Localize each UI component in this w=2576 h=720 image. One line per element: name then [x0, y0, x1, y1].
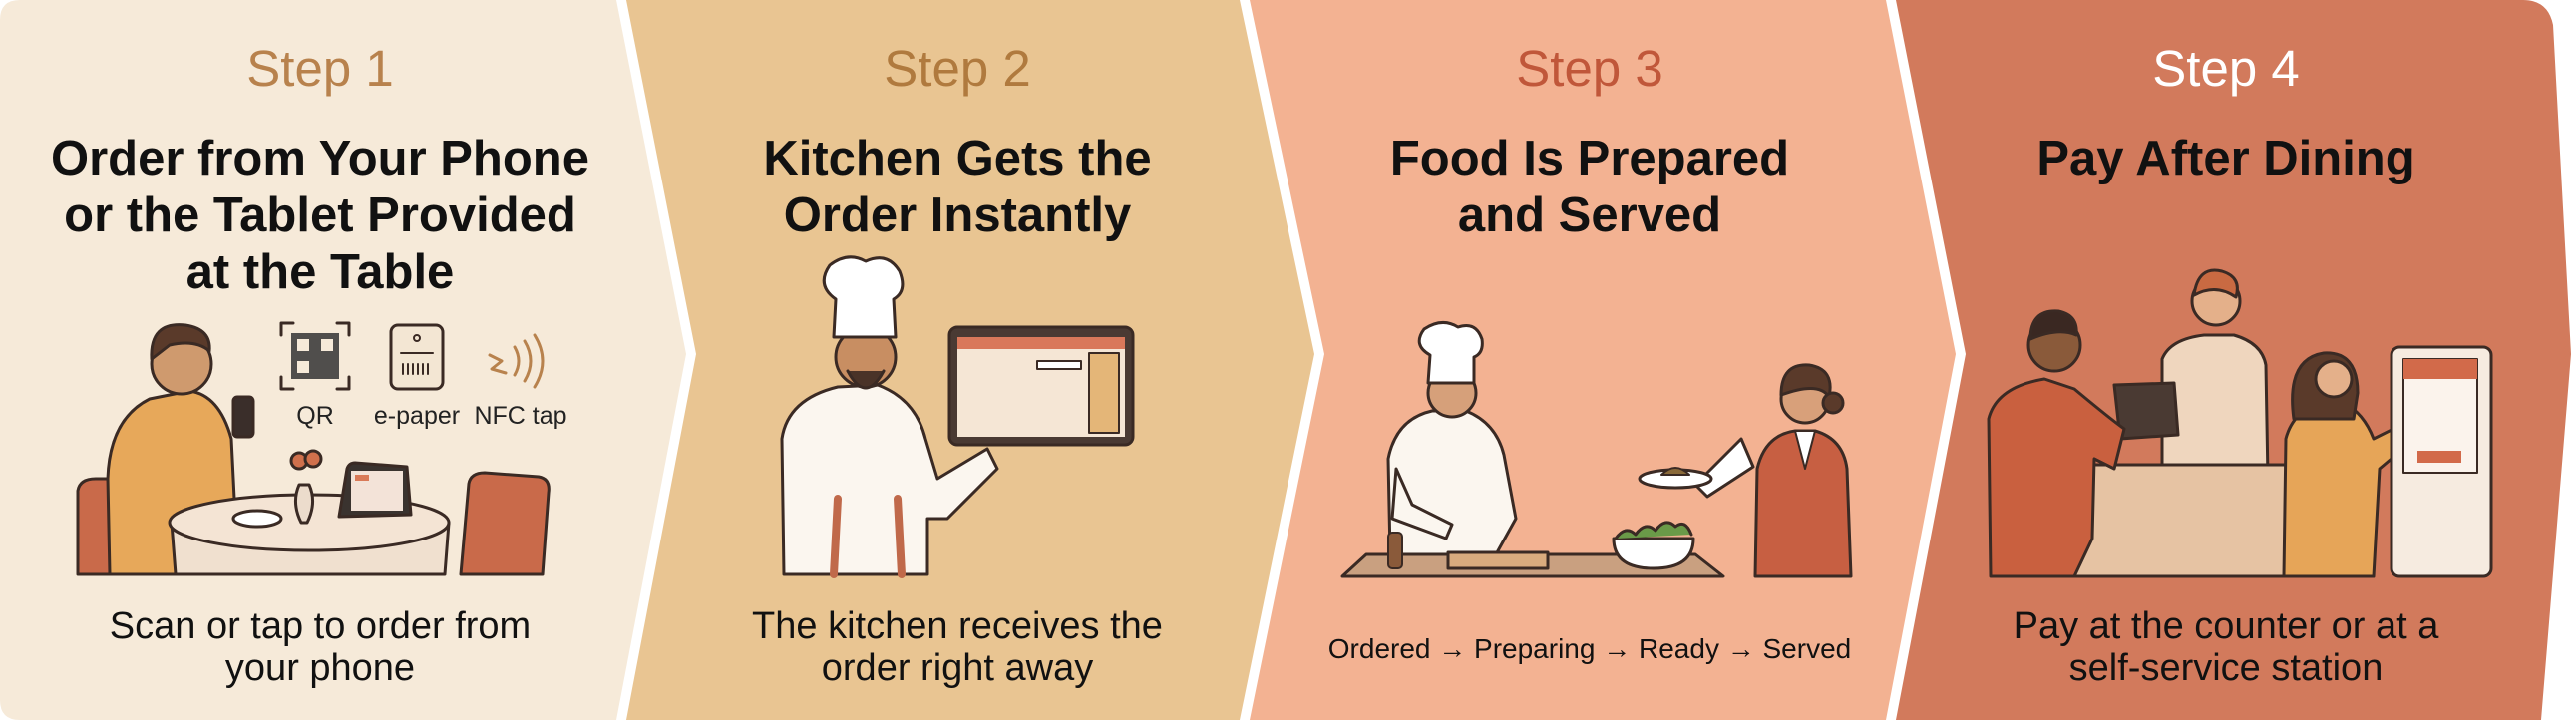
step 2 caption: The kitchen receives the — [752, 605, 1163, 647]
icon: QR — [281, 323, 349, 389]
step 1 label: Step 1 — [246, 40, 394, 97]
panel: step 1: NFC tap — [474, 402, 567, 430]
step 1 title: or the Tablet Provided — [64, 188, 576, 242]
icon: NFC — [490, 335, 543, 387]
step 1 caption: your phone — [225, 647, 415, 689]
illustration: diner at table — [78, 325, 549, 574]
step 3 caption: Ordered → Preparing → Ready → Served — [1328, 633, 1851, 664]
step 2 caption: order right away — [822, 647, 1093, 689]
panel: step 2 — [626, 0, 1314, 720]
step 1 title: Order from Your Phone — [51, 132, 589, 185]
panel: step 1: e-paper — [374, 402, 460, 430]
step 2 title: Kitchen Gets the — [763, 132, 1152, 185]
step 4 title: Pay After Dining — [2036, 132, 2415, 185]
step 1 caption: Scan or tap to order from — [110, 605, 531, 647]
illustration: counter and kiosk — [1989, 270, 2491, 576]
step 3 label: Step 3 — [1516, 40, 1663, 97]
icon labels: QR — [296, 402, 334, 430]
step 3 title: and Served — [1458, 188, 1721, 242]
step 3 title: Food Is Prepared — [1390, 132, 1789, 185]
step 2 label: Step 2 — [884, 40, 1031, 97]
step 4 label: Step 4 — [2152, 40, 2300, 97]
step 4 caption: Pay at the counter or at a — [2014, 605, 2439, 647]
icon: e-paper — [391, 325, 443, 389]
step 1 title: at the Table — [186, 245, 454, 299]
panel: step 3 — [1250, 0, 1956, 720]
step 2 title: Order Instantly — [784, 188, 1131, 242]
illustration: chef with tablet — [782, 257, 1133, 574]
step 4 caption: self-service station — [2069, 647, 2383, 689]
panel: step 4 — [1896, 0, 2571, 720]
illustration: chef and server — [1342, 322, 1851, 576]
panel: step 1 — [0, 0, 686, 720]
